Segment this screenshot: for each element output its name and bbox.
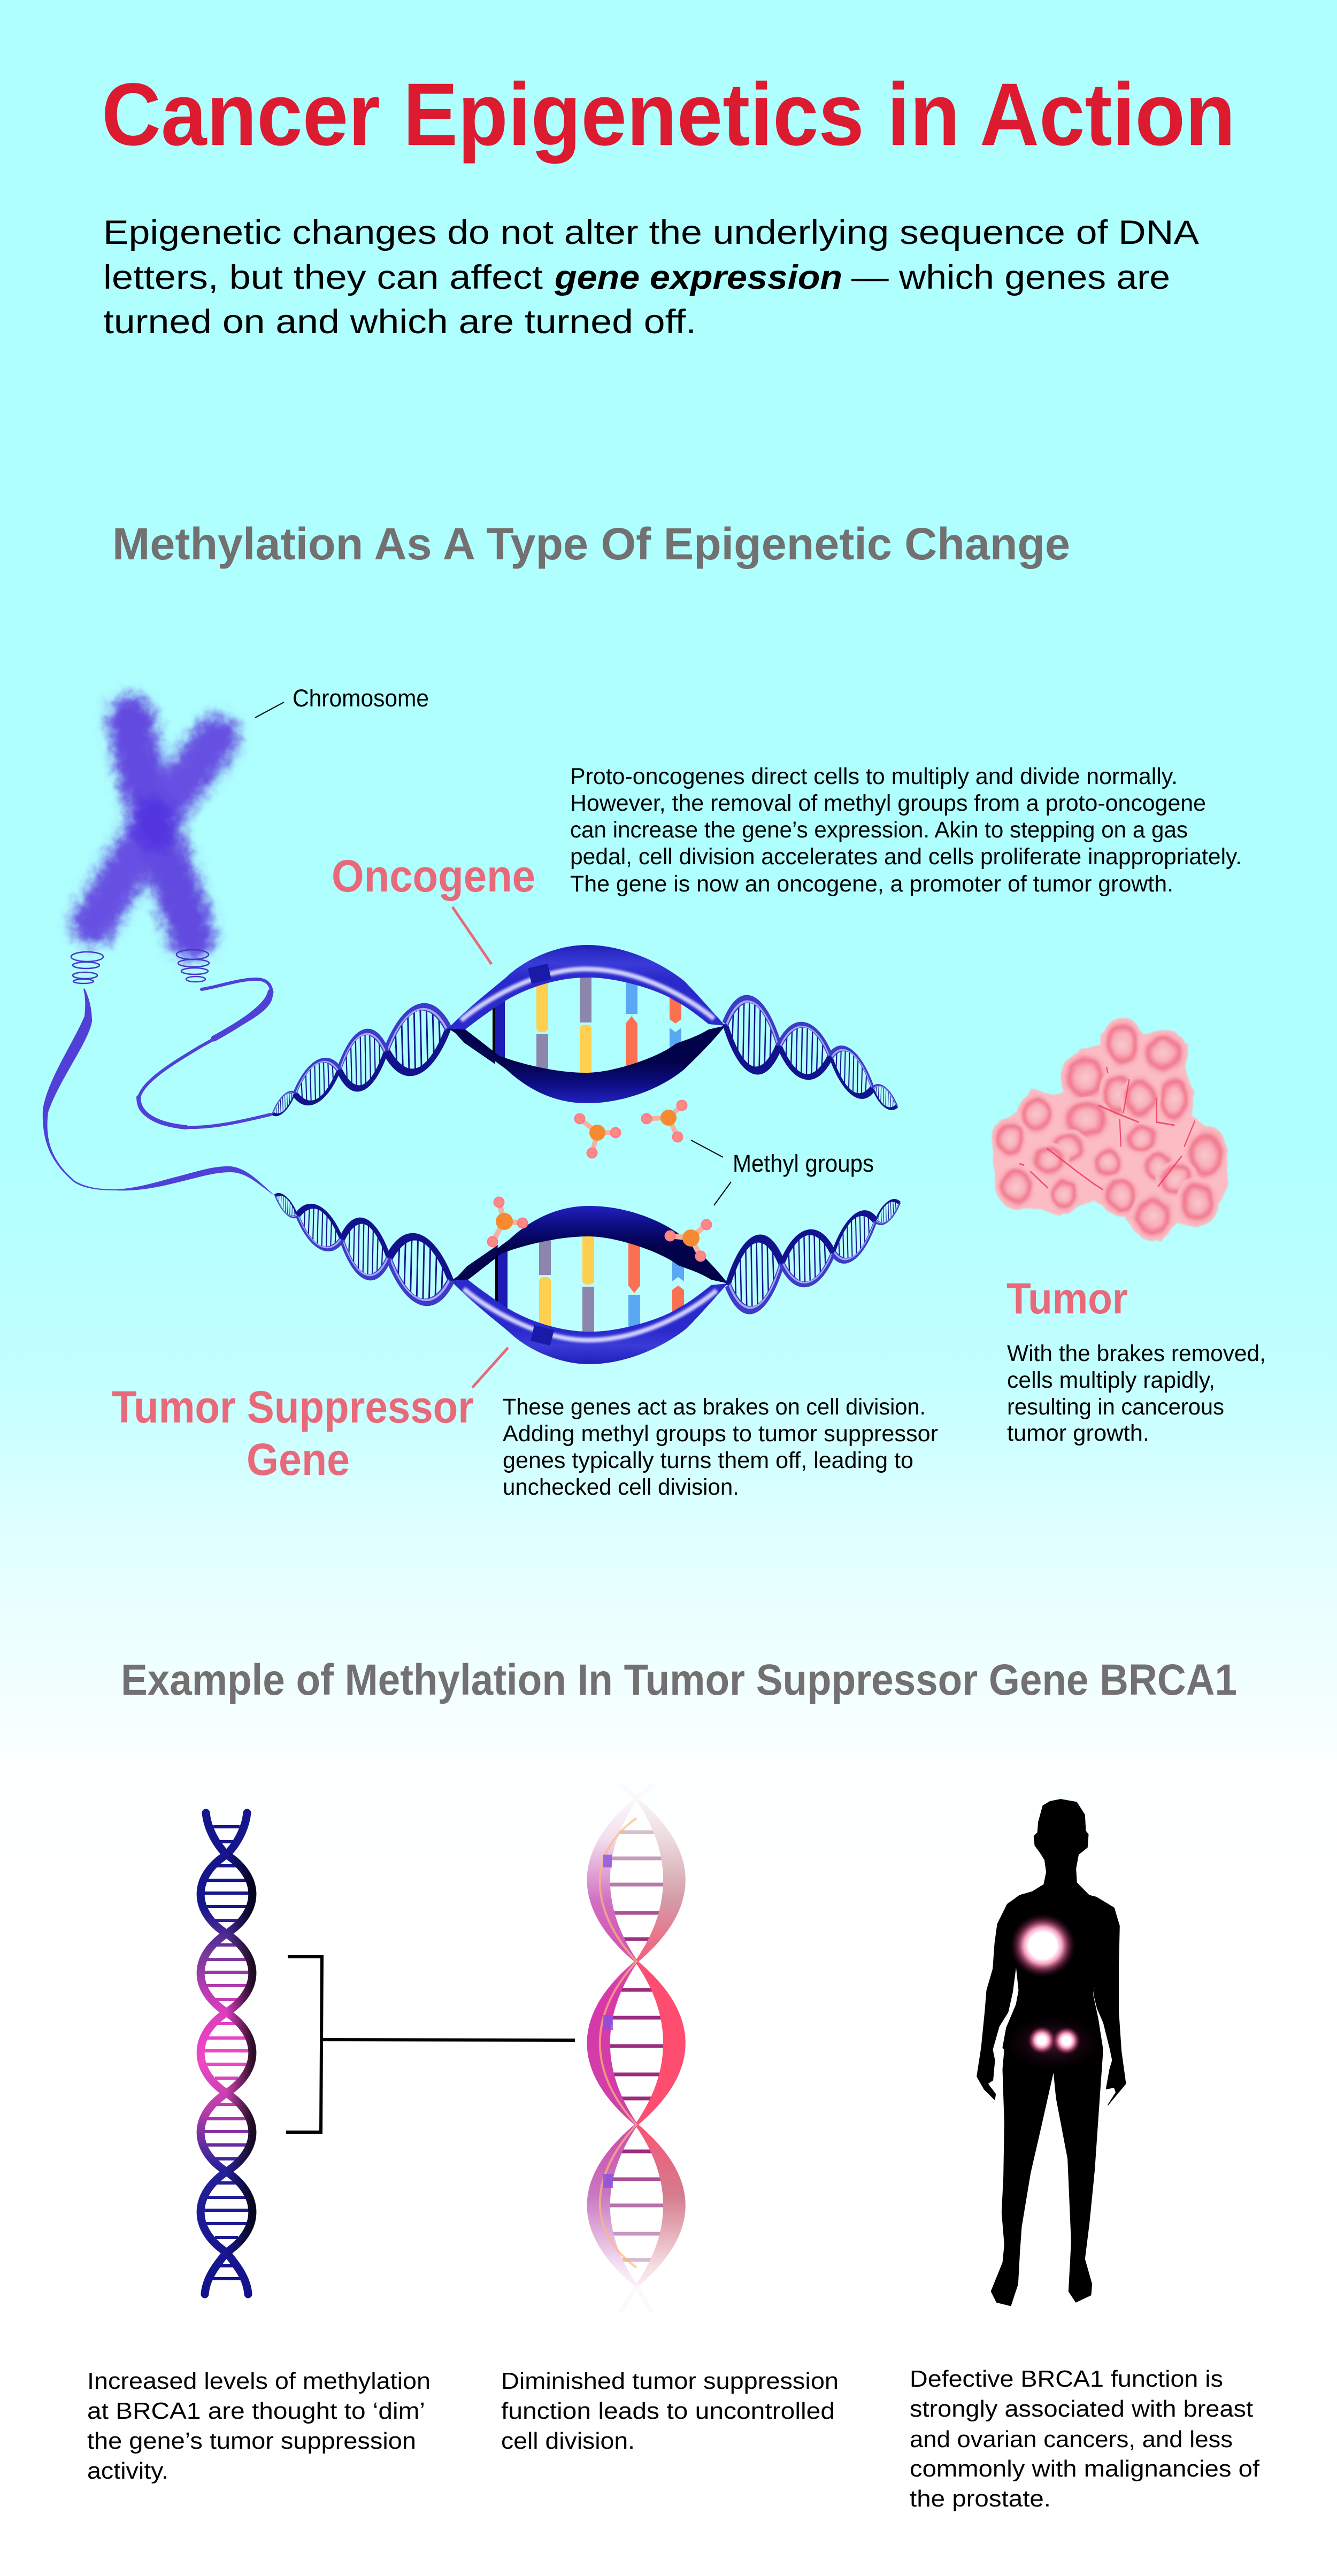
left strand highlight [600,1818,636,2267]
caption: increased methylation: the gene’s tumor suppression [87,2428,416,2454]
tumor text: With the brakes removed, [1007,1341,1266,1366]
cell boundaries [1019,1067,1195,1190]
heading: methylation as epigenetic change: Methylation As A Type Of Epigenetic Change [112,519,1070,569]
caption: defective BRCA1: the prostate. [910,2486,1051,2512]
tumor suppressor gene label with pointer [112,1348,508,1485]
oncogene label with pointer: Oncogene [332,851,535,901]
rungs [202,1827,251,2279]
intro text block: letters, but they can affect [103,259,543,296]
tumor suppressor paragraph: genes typically turns them off, leading to [503,1448,913,1473]
free methyl groups [575,1101,687,1158]
title: Cancer Epigenetics in Action [102,65,1235,164]
left strand [588,1798,636,2286]
caption: increased methylation: at BRCA1 are thought to ‘dim’ [87,2398,425,2424]
intro text block: — which genes are [851,259,1170,296]
rungs [607,1832,666,2260]
DNA with methylated region [201,1813,252,2294]
tumor cells [992,1018,1227,1241]
strands [201,1813,252,2294]
right strand [636,1798,684,2286]
caption: defective BRCA1: Defective BRCA1 function is [910,2366,1223,2392]
DNA helix: tumor suppressor gene [275,1188,900,1364]
chromosome label: Chromosome [293,685,429,712]
tumor heading: Tumor [1006,1274,1128,1323]
chromosome coil left [71,952,103,983]
violet patches [603,1855,613,2188]
tumor text: cells multiply rapidly, [1007,1367,1215,1393]
pelvic glow halo [1003,2015,1104,2071]
magnified DNA segment [588,1785,684,2313]
tumor suppressor paragraph [503,1394,938,1500]
caption: defective BRCA1: commonly with malignancies of [910,2456,1260,2482]
paragraph: proto-oncogenes: However, the removal of methyl groups from a proto-oncogene [570,790,1206,816]
chromosome illustration [71,719,217,983]
methyl groups label [691,1140,874,1205]
intro text block: turned on and which are turned off. [103,303,696,341]
tumor suppressor gene label with pointer: Tumor Suppressor [112,1382,474,1432]
tumor illustration [992,1018,1228,1242]
tumor text: resulting in cancerous [1007,1394,1224,1420]
paragraph: proto-oncogenes: pedal, cell division accelerates and cells proliferate inappropriately. [570,844,1242,870]
caption: diminished suppression: Diminished tumor suppression [501,2368,839,2394]
paragraph: proto-oncogenes: Proto-oncogenes direct cells to multiply and divide normally. [570,764,1178,789]
base pairs [493,973,681,1076]
chromosome coil right [176,950,209,982]
tumor text: tumor growth. [1007,1420,1149,1446]
tumor text [1007,1341,1266,1446]
intro text block: gene expression [554,259,842,296]
paragraph: proto-oncogenes [570,764,1242,897]
chromosome label [255,685,429,718]
caption: diminished suppression [501,2368,839,2454]
heading: BRCA1 example: Example of Methylation In Tumor Suppressor Gene BRCA1 [121,1656,1237,1704]
ribbon to tumor suppressor helix [43,988,276,1197]
tumor mass [992,1018,1228,1242]
right twists [725,989,779,1080]
human silhouette [977,1800,1126,2305]
caption: defective BRCA1 [910,2366,1260,2512]
caption: diminished suppression: cell division. [501,2428,635,2454]
tumor suppressor paragraph: These genes act as brakes on cell division. [503,1394,926,1420]
paragraph: proto-oncogenes: The gene is now an oncogene, a promoter of tumor growth. [570,871,1173,897]
intro text block: Epigenetic changes do not alter the underlying sequence of DNA [103,214,1199,251]
bracket connector [286,1957,575,2132]
ovary glows [1027,2026,1081,2055]
tumor suppressor paragraph: unchecked cell division. [503,1474,739,1500]
caption: increased methylation [87,2368,431,2484]
caption: increased methylation: activity. [87,2458,168,2484]
oncogene label with pointer [332,851,535,964]
DNA helix: oncogene [273,945,897,1121]
tumor suppressor paragraph: Adding methyl groups to tumor suppressor [503,1421,938,1447]
faded strand tips [620,1785,652,2313]
ribbon to oncogene helix [139,979,272,1127]
breast glow [1010,1913,1076,1978]
caption: defective BRCA1: strongly associated with breast [910,2396,1253,2422]
caption: defective BRCA1: and ovarian cancers, and less [910,2426,1233,2452]
upper strand [448,945,725,1029]
caption: increased methylation: Increased levels of methylation [87,2368,431,2394]
intro text block [103,214,1199,341]
methyl groups label: Methyl groups [733,1150,874,1177]
caption: diminished suppression: function leads to uncontrolled [501,2398,835,2424]
paragraph: proto-oncogenes: can increase the gene’s expression. Akin to stepping on a gas [570,817,1188,843]
strand shading [227,1855,252,2252]
left twists [386,997,448,1082]
lower strand [448,1026,725,1103]
attached methyl groups [488,1197,711,1261]
tumor suppressor gene label with pointer: Gene [247,1434,350,1485]
